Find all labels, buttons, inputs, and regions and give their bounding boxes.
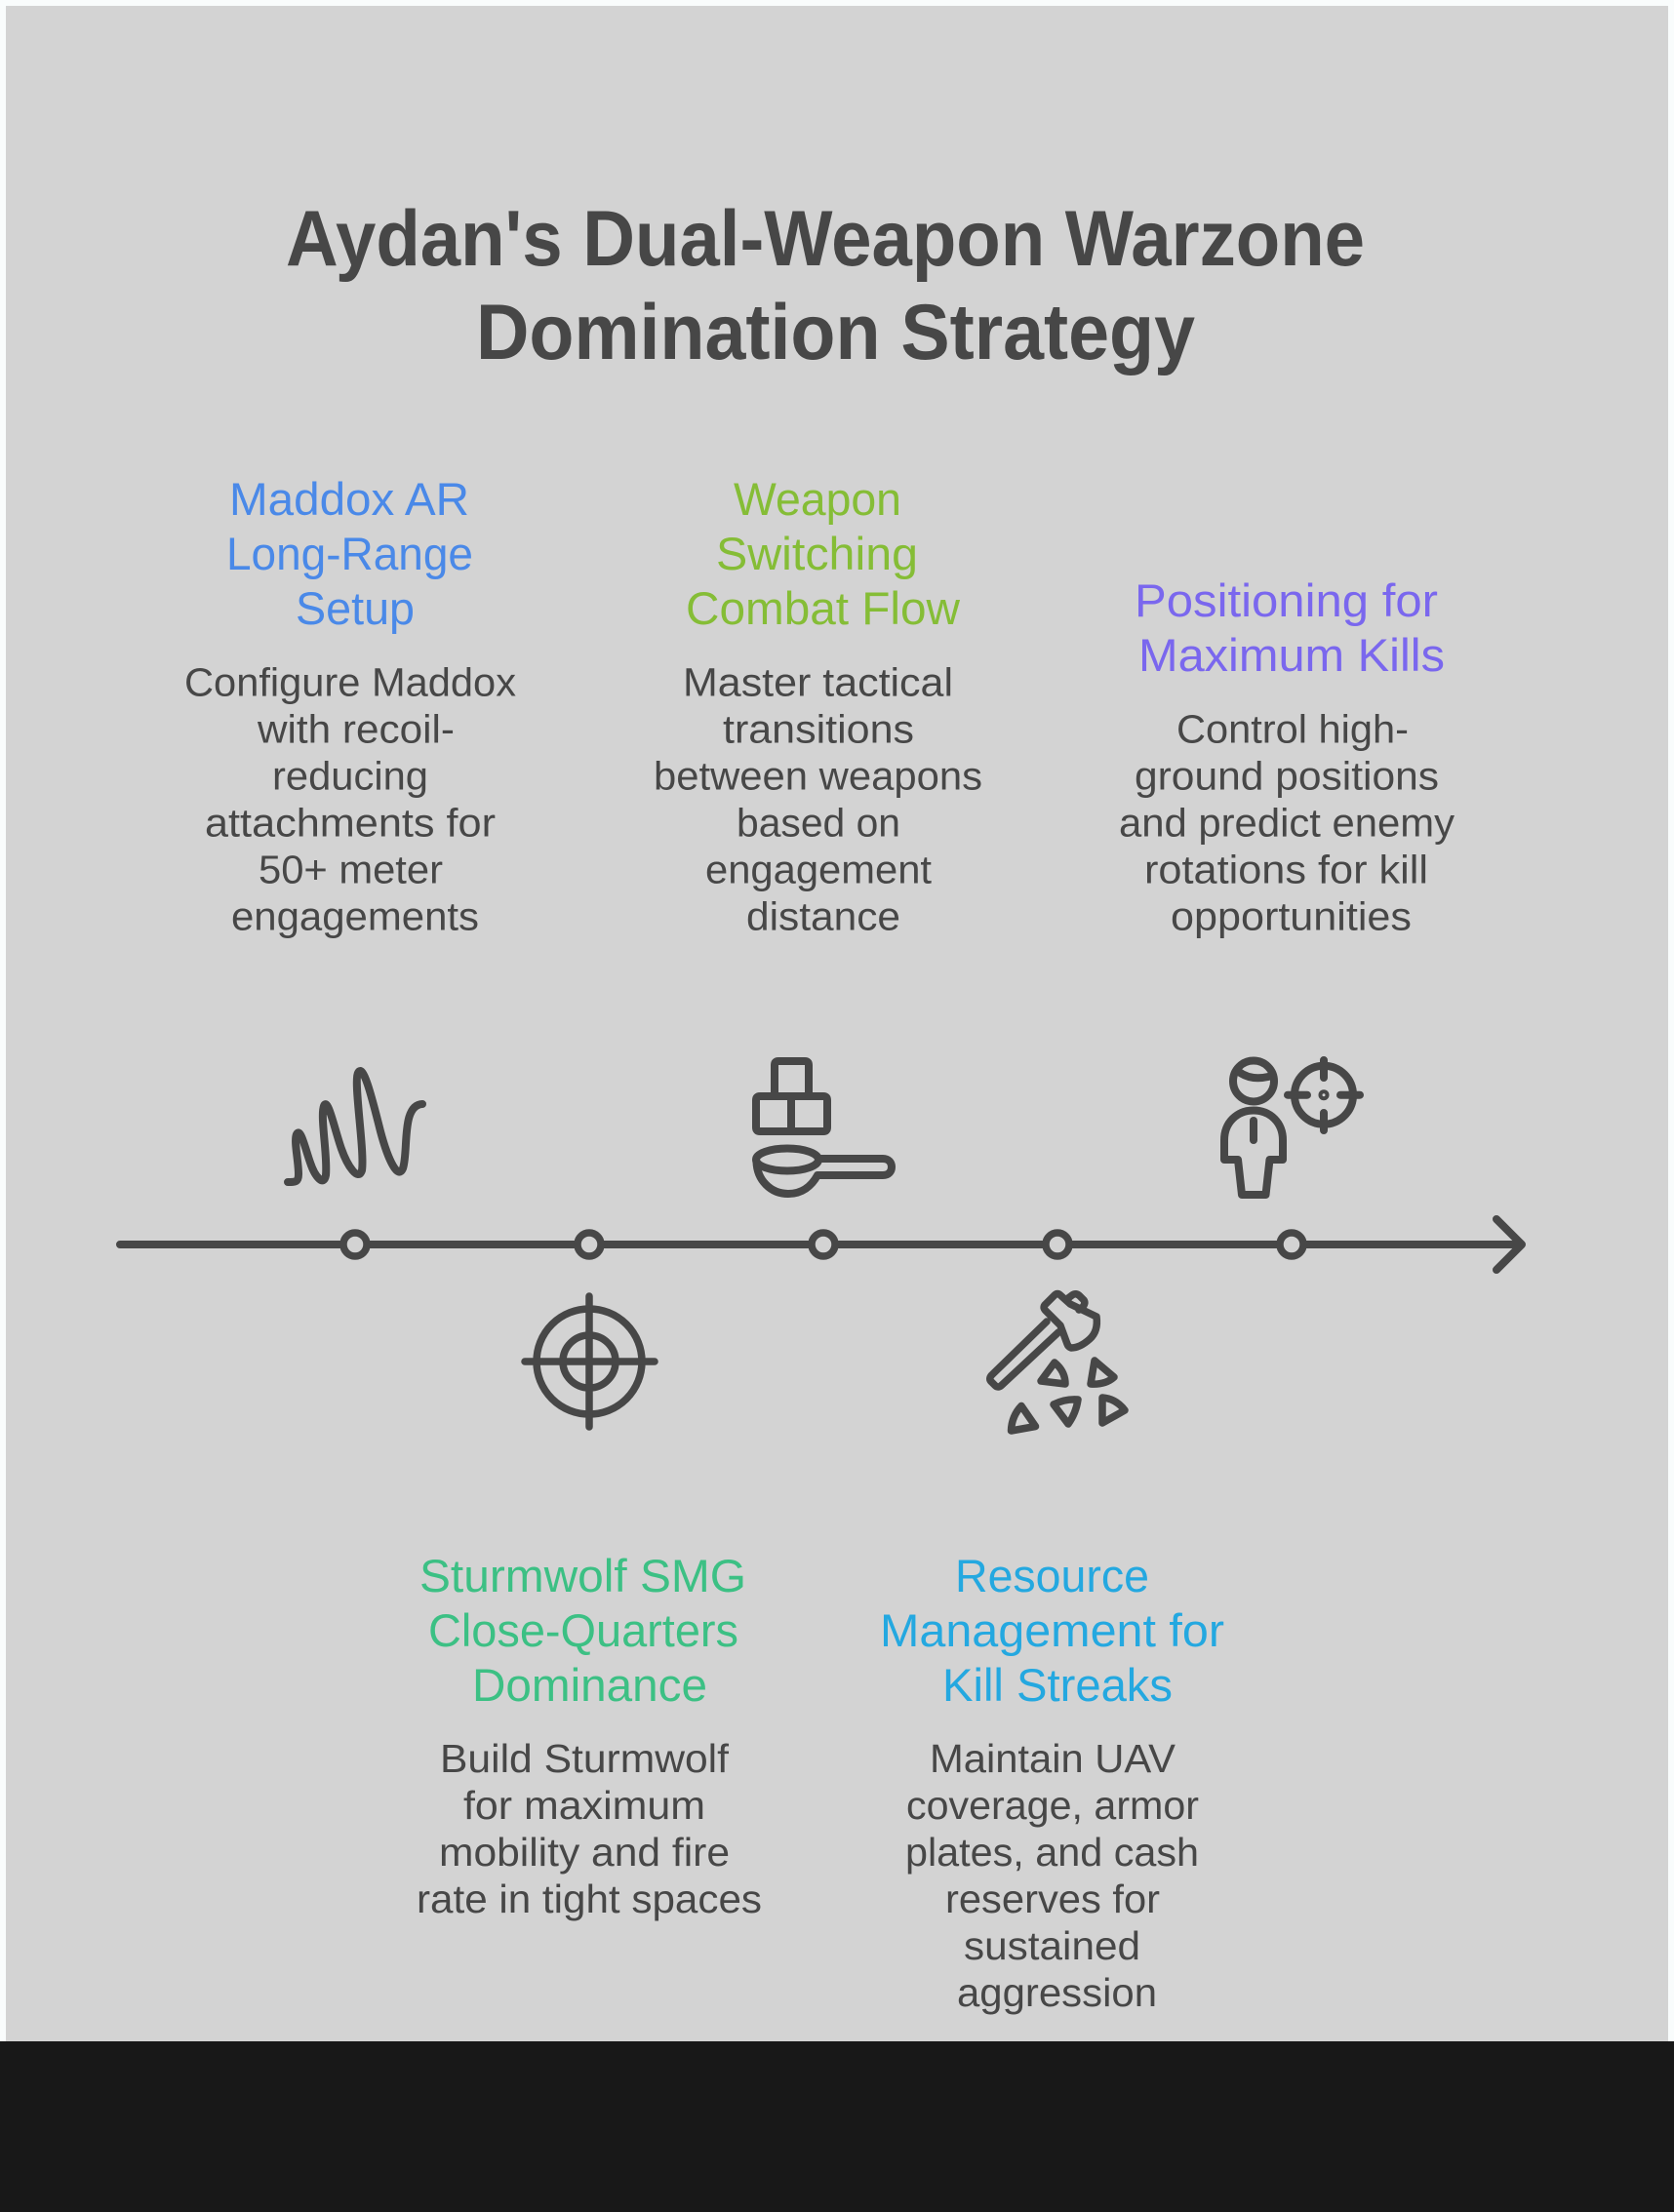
panel: weapon switching combat flow bbox=[654, 473, 982, 938]
text: Maddox description: with recoil- bbox=[257, 706, 455, 751]
panel: resource management bbox=[880, 1550, 1224, 2015]
text: switching description: between weapons bbox=[654, 753, 982, 798]
text: Sturmwolf description: rate in tight spaces bbox=[417, 1876, 762, 1921]
text: switching description: based on bbox=[737, 800, 900, 845]
text: switching description: transitions bbox=[723, 706, 914, 751]
text: switching description bbox=[654, 659, 982, 938]
heading: Sturmwolf: Close-Quarters bbox=[428, 1604, 738, 1656]
heading: Maddox AR: Setup bbox=[296, 582, 415, 634]
text: Maddox description bbox=[184, 659, 517, 938]
text: Maddox description: 50+ meter bbox=[259, 847, 443, 891]
heading: Maddox AR: Long-Range bbox=[226, 528, 473, 579]
heading: Weapon Switching: Weapon bbox=[734, 473, 901, 525]
timeline arrow bbox=[120, 1219, 1522, 1270]
text: resource description: plates, and cash bbox=[905, 1830, 1199, 1875]
panel: Sturmwolf SMG close-quarters bbox=[417, 1550, 762, 1921]
title bbox=[286, 195, 1365, 376]
heading: Positioning bbox=[1135, 574, 1445, 681]
text: Maddox description: engagements bbox=[231, 893, 479, 938]
text: Sturmwolf description: mobility and fire bbox=[439, 1830, 730, 1875]
text: resource description: reserves for bbox=[945, 1876, 1160, 1921]
icon: target bbox=[525, 1296, 655, 1427]
heading: Resource Management: Resource bbox=[955, 1550, 1149, 1601]
text: positioning description: and predict enemy bbox=[1119, 800, 1455, 845]
heading: Weapon Switching: Switching bbox=[716, 528, 918, 579]
text: resource description: Maintain UAV bbox=[930, 1736, 1176, 1781]
heading: Sturmwolf bbox=[419, 1550, 746, 1711]
text: switching description: Master tactical bbox=[683, 659, 953, 704]
heading: Positioning: Positioning for bbox=[1135, 574, 1438, 626]
title: Aydan's Dual-Weapon Warzone bbox=[286, 195, 1365, 283]
text: positioning description bbox=[1119, 706, 1455, 938]
text: positioning description: ground positions bbox=[1135, 753, 1439, 798]
heading: Maddox AR bbox=[226, 473, 473, 634]
text: resource description: aggression bbox=[957, 1970, 1157, 2015]
heading: Sturmwolf: Dominance bbox=[472, 1659, 707, 1711]
text: resource description bbox=[905, 1736, 1199, 2015]
heading: Weapon Switching: Combat Flow bbox=[686, 582, 961, 634]
text: positioning description: rotations for kill bbox=[1144, 847, 1428, 891]
text: Sturmwolf description bbox=[417, 1736, 762, 1921]
text: positioning description: opportunities bbox=[1171, 893, 1412, 938]
heading: Weapon Switching bbox=[686, 473, 961, 634]
icon: soldier with crosshair bbox=[1224, 1060, 1360, 1195]
panel: Maddox AR long-range setup bbox=[184, 473, 517, 938]
text: Maddox description: Configure Maddox bbox=[184, 659, 517, 704]
heading: Sturmwolf: Sturmwolf SMG bbox=[419, 1550, 746, 1601]
title: Domination Strategy bbox=[476, 289, 1195, 376]
heading: Resource Management bbox=[880, 1550, 1224, 1711]
panel: positioning for maximum kills bbox=[1119, 574, 1455, 938]
text: Sturmwolf description: for maximum bbox=[463, 1783, 705, 1828]
icon: axe and fragments bbox=[990, 1293, 1125, 1431]
text: resource description: coverage, armor bbox=[906, 1783, 1199, 1828]
text: positioning description: Control high- bbox=[1176, 706, 1409, 751]
heading: Maddox AR: Maddox AR bbox=[229, 473, 469, 525]
icon: recoil waveform bbox=[288, 1071, 422, 1182]
text: switching description: distance bbox=[746, 893, 900, 938]
bottom black band bbox=[0, 2041, 1674, 2212]
text: Maddox description: reducing bbox=[272, 753, 428, 798]
text: resource description: sustained bbox=[964, 1923, 1140, 1968]
text: switching description: engagement bbox=[705, 847, 933, 891]
heading: Resource Management: Management for bbox=[880, 1604, 1224, 1656]
heading: Resource Management: Kill Streaks bbox=[942, 1659, 1173, 1711]
text: Maddox description: attachments for bbox=[205, 800, 496, 845]
icon: blocks and spoon bbox=[756, 1061, 892, 1194]
heading: Positioning: Maximum Kills bbox=[1138, 629, 1445, 681]
text: Sturmwolf description: Build Sturmwolf bbox=[440, 1736, 730, 1781]
